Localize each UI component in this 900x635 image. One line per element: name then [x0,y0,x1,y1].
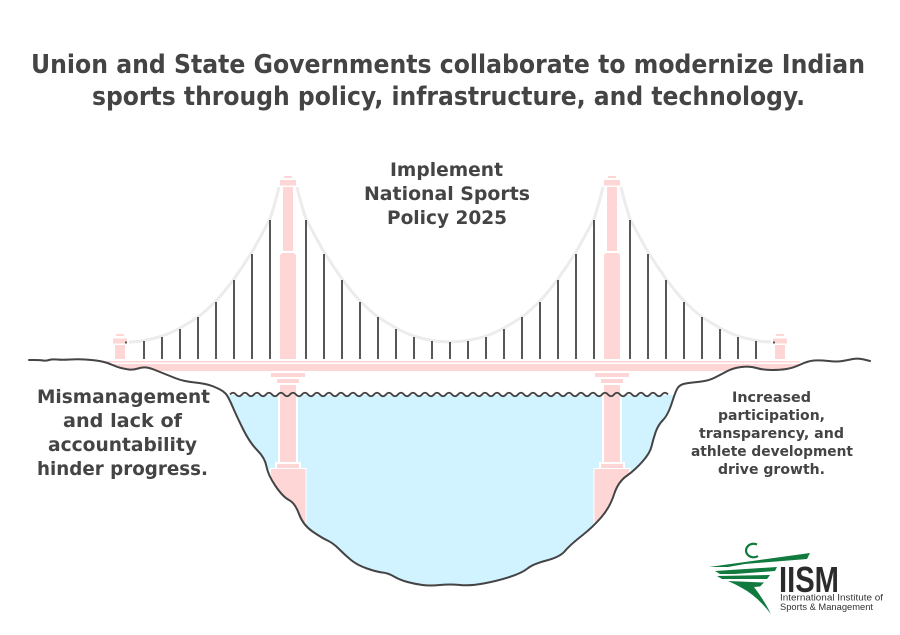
IISM logo [709,544,884,614]
title: sports through policy, infrastructure, and technology. [92,82,805,112]
earth mask [29,359,870,635]
title [31,50,865,112]
suspender hangers [126,220,774,359]
right label: outcomes: athlete development [691,444,853,460]
center label: implement policy: Policy 2025 [387,207,507,229]
logo subtitle: Sports & Management [780,602,874,612]
center label: implement policy: National Sports [364,183,530,205]
left anchor tower [113,334,127,359]
logo subtitle [780,592,884,612]
bridge deck [100,361,800,371]
right label: outcomes: transparency, and [699,426,844,442]
center label: implement policy: Implement [390,159,503,181]
left label: obstacles: hinder progress. [37,458,208,480]
right label: outcomes: drive growth. [718,462,825,478]
bridge illustration [29,176,870,635]
right anchor tower [773,334,787,359]
center label: implement policy [364,159,530,229]
main cables [129,187,771,342]
logo subtitle: International Institute of [780,592,884,602]
left label: obstacles [37,386,210,480]
right label: outcomes: Increased [732,390,811,406]
right label: outcomes [691,390,853,478]
logo wordmark: IISM [779,559,839,600]
left pier [270,373,306,539]
left tower [280,176,296,359]
water surface wave [230,393,668,396]
right label: outcomes: participation, [718,408,825,424]
ground and riverbed outline [29,359,870,586]
left label: obstacles: and lack of [63,410,183,432]
left label: obstacles: Mismanagement [37,386,210,408]
left label: obstacles: accountability [48,434,198,456]
water [226,395,678,590]
right tower [604,176,620,359]
right pier [594,373,630,539]
icon: athlete swoosh [709,544,810,614]
